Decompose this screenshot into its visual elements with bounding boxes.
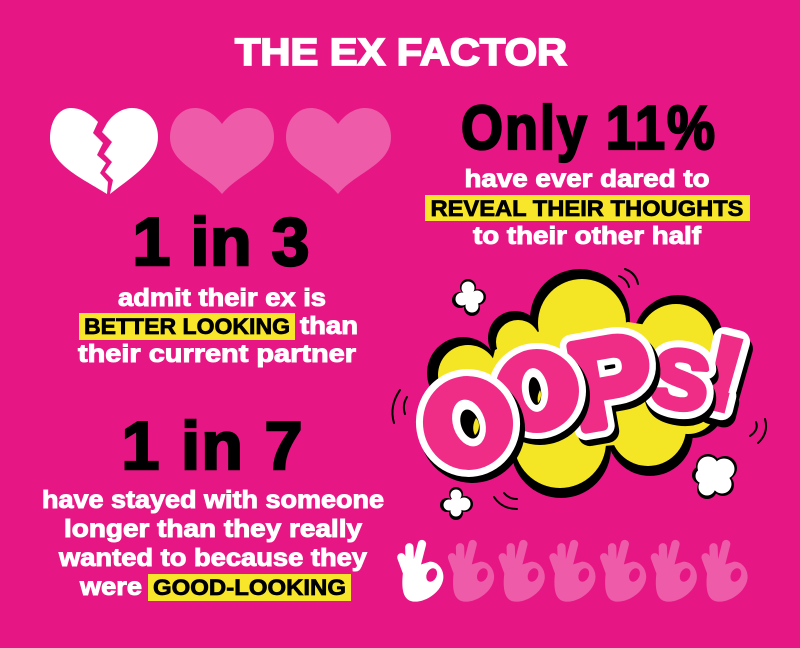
text block: reveal their thoughts: REVEAL THEIR THOUGHTS	[430, 196, 744, 221]
text block: good-looking: have stayed with someone	[42, 486, 384, 514]
letter s: s	[643, 307, 721, 435]
text block: better looking	[78, 284, 358, 368]
hand faded 7	[706, 544, 748, 602]
cloud outline	[427, 269, 725, 498]
letter s: s	[645, 313, 723, 442]
burst blob top left	[452, 279, 486, 316]
letter P: P	[559, 308, 663, 456]
icon: broken heart	[50, 108, 158, 194]
icon: heart 3	[286, 108, 391, 194]
stat: only 11%: Only 11%	[461, 94, 715, 163]
text block: reveal their thoughts: to their other half	[473, 222, 702, 250]
burst blob bottom left	[440, 487, 473, 520]
hand white	[401, 544, 443, 602]
letter !: !	[694, 316, 753, 432]
text block: good-looking: GOOD-LOOKING	[153, 575, 346, 600]
stat: 1 in 3: 1 in 3	[132, 204, 310, 280]
icon: heart 2	[170, 108, 274, 194]
text block: good-looking: were	[79, 573, 142, 601]
text block: reveal their thoughts	[425, 165, 750, 250]
hand row	[401, 544, 748, 602]
cloud fill	[438, 279, 718, 488]
text block: better looking: BETTER LOOKING	[84, 314, 290, 339]
hand faded 5	[604, 544, 646, 602]
text block: good-looking: longer than they really	[64, 515, 362, 543]
text block: good-looking: wanted to because they	[58, 544, 367, 572]
burst blob bottom right	[692, 454, 737, 499]
letter P: P	[563, 313, 667, 461]
letter O large: O	[416, 360, 519, 489]
letter !: !	[694, 316, 753, 432]
letter P: P	[559, 308, 663, 456]
text block: better looking: than	[300, 312, 358, 340]
letter !: !	[696, 322, 755, 439]
letter s: s	[643, 307, 721, 435]
text block: better looking: their current partner	[78, 340, 356, 368]
text block: good-looking	[42, 486, 384, 601]
letter O small: O	[495, 339, 578, 448]
hand faded 3	[503, 544, 545, 602]
text block: better looking: admit their ex is	[118, 284, 326, 312]
text block: reveal their thoughts: have ever dared to	[464, 165, 710, 193]
oops burst illustration	[392, 269, 766, 520]
hand faded 2	[452, 544, 494, 602]
hand faded 4	[553, 544, 595, 602]
hand faded 6	[655, 544, 697, 602]
motion lines	[392, 269, 766, 509]
title: THE EX FACTOR	[235, 32, 567, 74]
stat: 1 in 7: 1 in 7	[122, 408, 302, 484]
